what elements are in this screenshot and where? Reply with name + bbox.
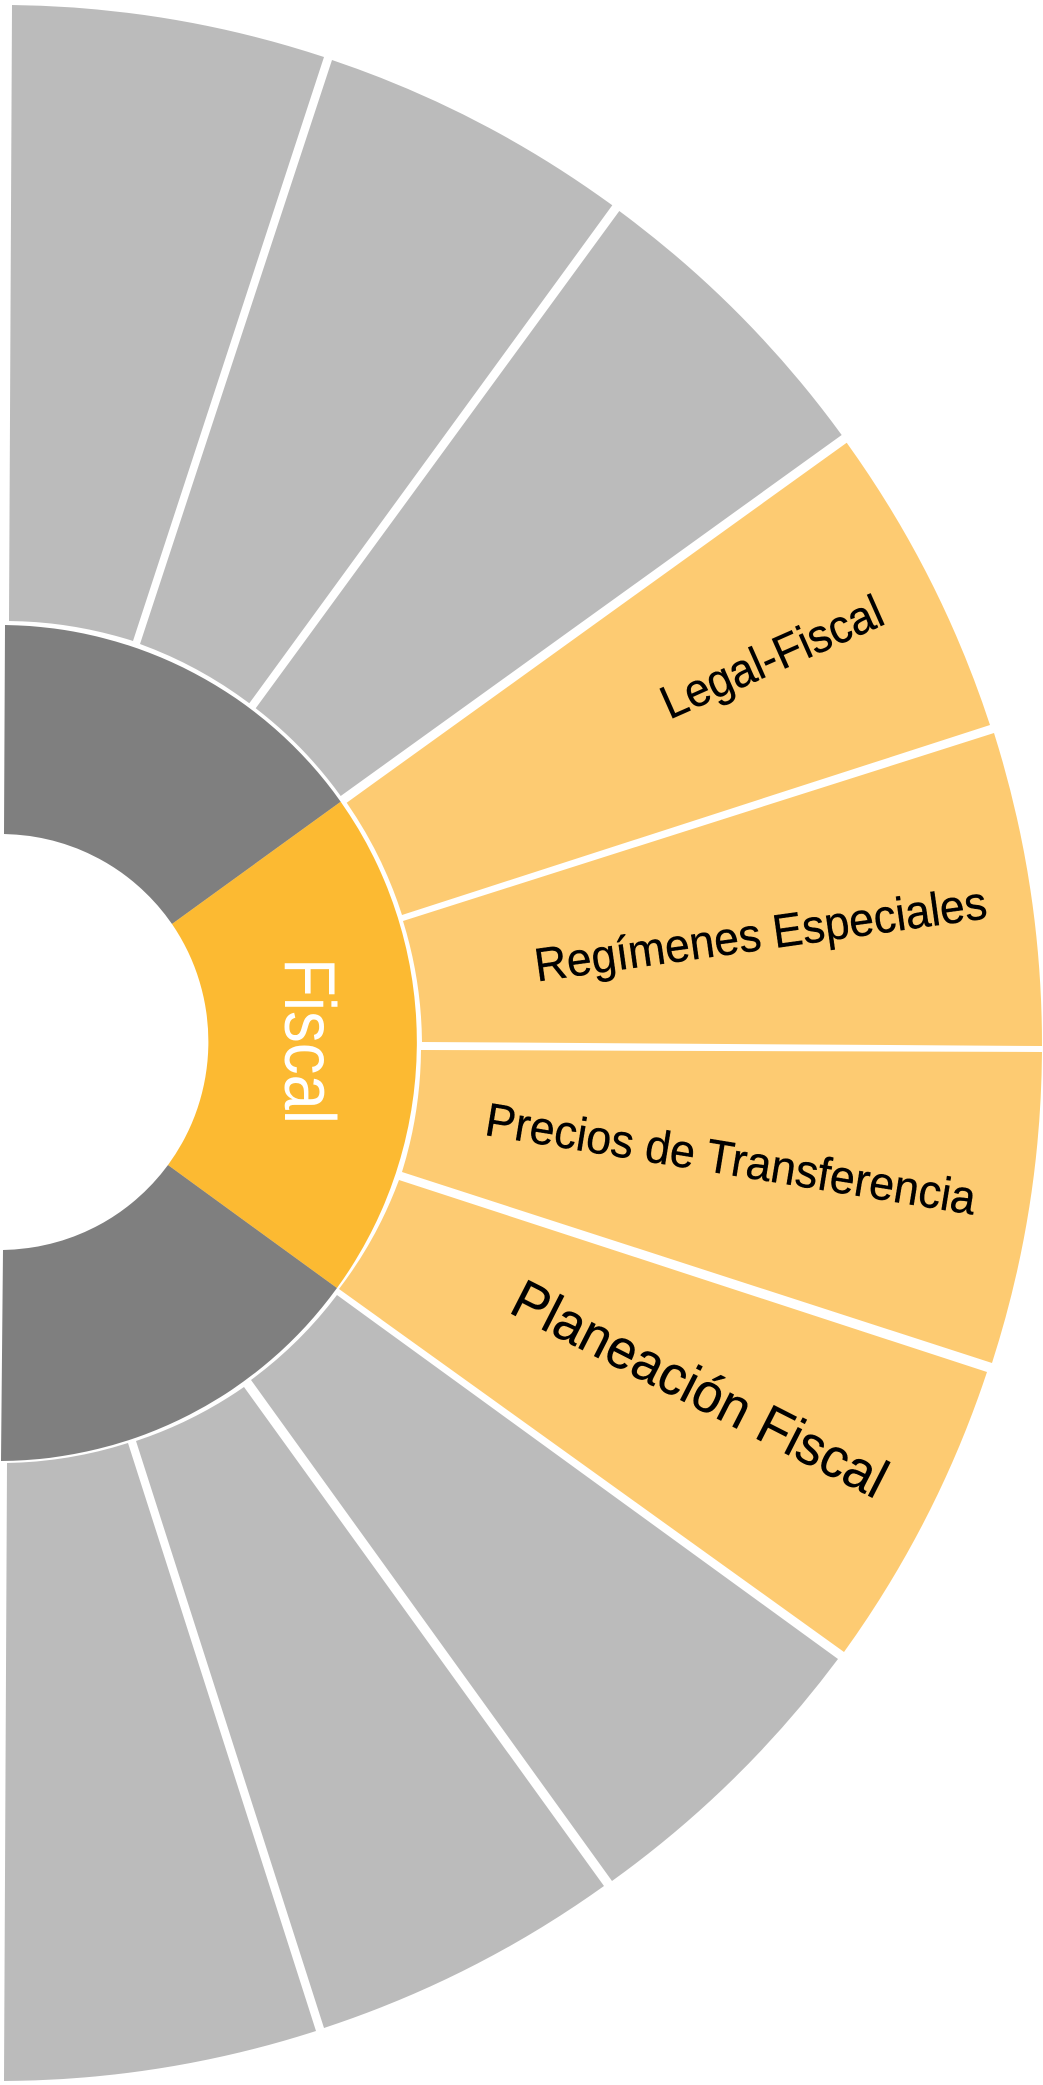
outer segment: gray 3 — [256, 211, 842, 796]
label: Fiscal: Fiscal — [269, 958, 349, 1124]
outer segment: gray 5 — [251, 1295, 838, 1881]
outer segment: gray 6 — [136, 1387, 604, 2028]
inner ring: dark bottom — [1, 1165, 337, 1461]
outer segment: gray 2 — [140, 60, 612, 703]
inner ring: dark top — [4, 625, 341, 924]
label: Regímenes Especiales: Regímenes Especiales — [531, 875, 990, 991]
outer segment: gray 7 — [4, 1443, 316, 2081]
inner ring: Fiscal segment — [168, 802, 417, 1288]
label: Legal-Fiscal: Legal-Fiscal — [652, 584, 891, 729]
label: Precios de Transferencia: Precios de Transferencia — [482, 1092, 981, 1225]
outer segment: Legal-Fiscal — [347, 443, 990, 915]
outer segment: gray 1 — [9, 5, 324, 641]
outer segment: Regímenes Especiales — [403, 733, 1042, 1046]
outer segment: Planeación Fiscal — [339, 1180, 987, 1652]
outer segment: Precios de Transferencia — [402, 1050, 1042, 1363]
label: Planeación Fiscal: Planeación Fiscal — [502, 1267, 898, 1510]
